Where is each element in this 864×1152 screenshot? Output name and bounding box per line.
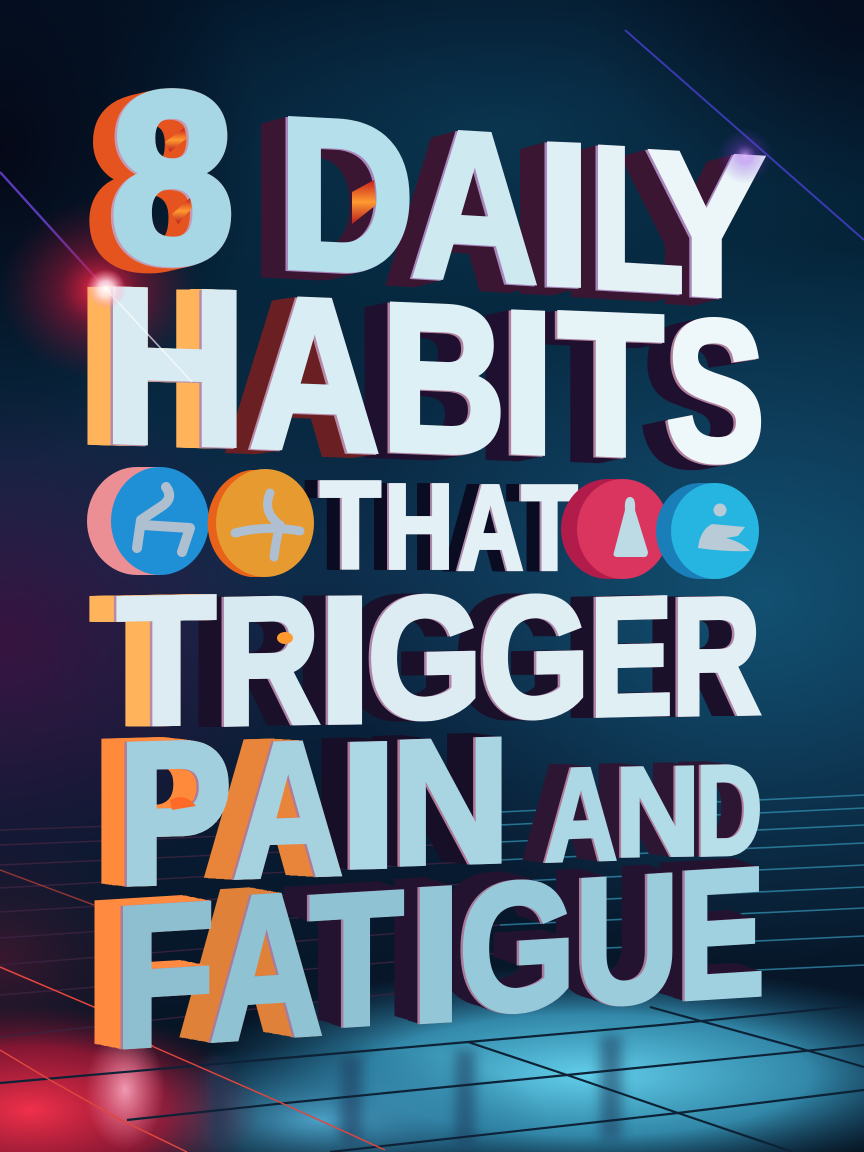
word: DAILY: Y <box>649 109 764 341</box>
highlight: orange reflections inside letter counters <box>165 128 376 810</box>
word: TRIGGER <box>117 557 761 763</box>
word: HABITS: I <box>501 269 555 497</box>
word: HABITS: H <box>103 242 247 492</box>
word: THAT: T <box>522 460 578 595</box>
word: THAT: T <box>320 456 381 594</box>
word: FATIGUE: F <box>114 859 215 1090</box>
glow: red flare behind H <box>0 200 200 380</box>
icon: blue badge with stretching figure <box>87 467 209 575</box>
word: PAIN: A <box>233 701 343 918</box>
word: TRIGGER: I <box>318 559 372 761</box>
word: FATIGUE: U <box>575 835 679 1044</box>
word: AND: N <box>615 740 700 883</box>
word: TRIGGER: G <box>367 560 482 756</box>
icon: cyan badge with seated figure <box>656 483 759 579</box>
word: HABITS: T <box>558 269 664 499</box>
light streak: top right diagonal <box>625 30 864 240</box>
word: PAIN <box>118 698 510 927</box>
icon row: round badges flanking THAT <box>87 467 759 579</box>
word: PAIN: P <box>118 698 232 927</box>
word: THAT <box>320 456 578 595</box>
word: AND: A <box>544 740 617 889</box>
word: HABITS: B <box>381 259 506 499</box>
word: DAILY: A <box>412 85 538 327</box>
word: TRIGGER: G <box>479 560 590 754</box>
light streak: left diagonal <box>0 172 105 288</box>
word: FATIGUE: E <box>678 829 765 1038</box>
word: THAT: A <box>457 460 524 595</box>
flare: purple star at Y corner <box>717 128 773 184</box>
word: TRIGGER: R <box>217 558 320 763</box>
word: HABITS <box>103 242 765 505</box>
word: TRIGGER: E <box>590 562 673 752</box>
icon: orange badge with reclining figure <box>208 469 314 577</box>
word: HABITS: S <box>666 278 765 505</box>
word: FATIGUE: A <box>210 850 323 1084</box>
word: DAILY <box>278 72 764 341</box>
word: DAILY: D <box>278 72 415 319</box>
light streak: across H face <box>105 288 192 382</box>
word: THAT: H <box>384 460 454 594</box>
number 8: 8 <box>110 41 235 313</box>
word: TRIGGER: R <box>672 563 761 751</box>
word: FATIGUE: I <box>410 846 462 1063</box>
floor: reflective perspective grid <box>0 795 864 1152</box>
word: FATIGUE: G <box>459 842 576 1052</box>
word: DAILY: L <box>590 104 684 335</box>
word: PAIN: N <box>391 701 510 903</box>
word: TRIGGER: T <box>117 557 216 763</box>
flare: white core at H corner <box>86 269 126 309</box>
icon: red badge with pawn figure <box>561 479 669 579</box>
word: FATIGUE: T <box>310 853 403 1068</box>
word: AND: D <box>696 738 762 883</box>
word: HABITS: A <box>250 252 380 497</box>
word: AND <box>544 738 762 889</box>
word: PAIN: I <box>339 705 398 905</box>
word: DAILY: I <box>537 101 591 329</box>
word: FATIGUE <box>114 829 765 1090</box>
